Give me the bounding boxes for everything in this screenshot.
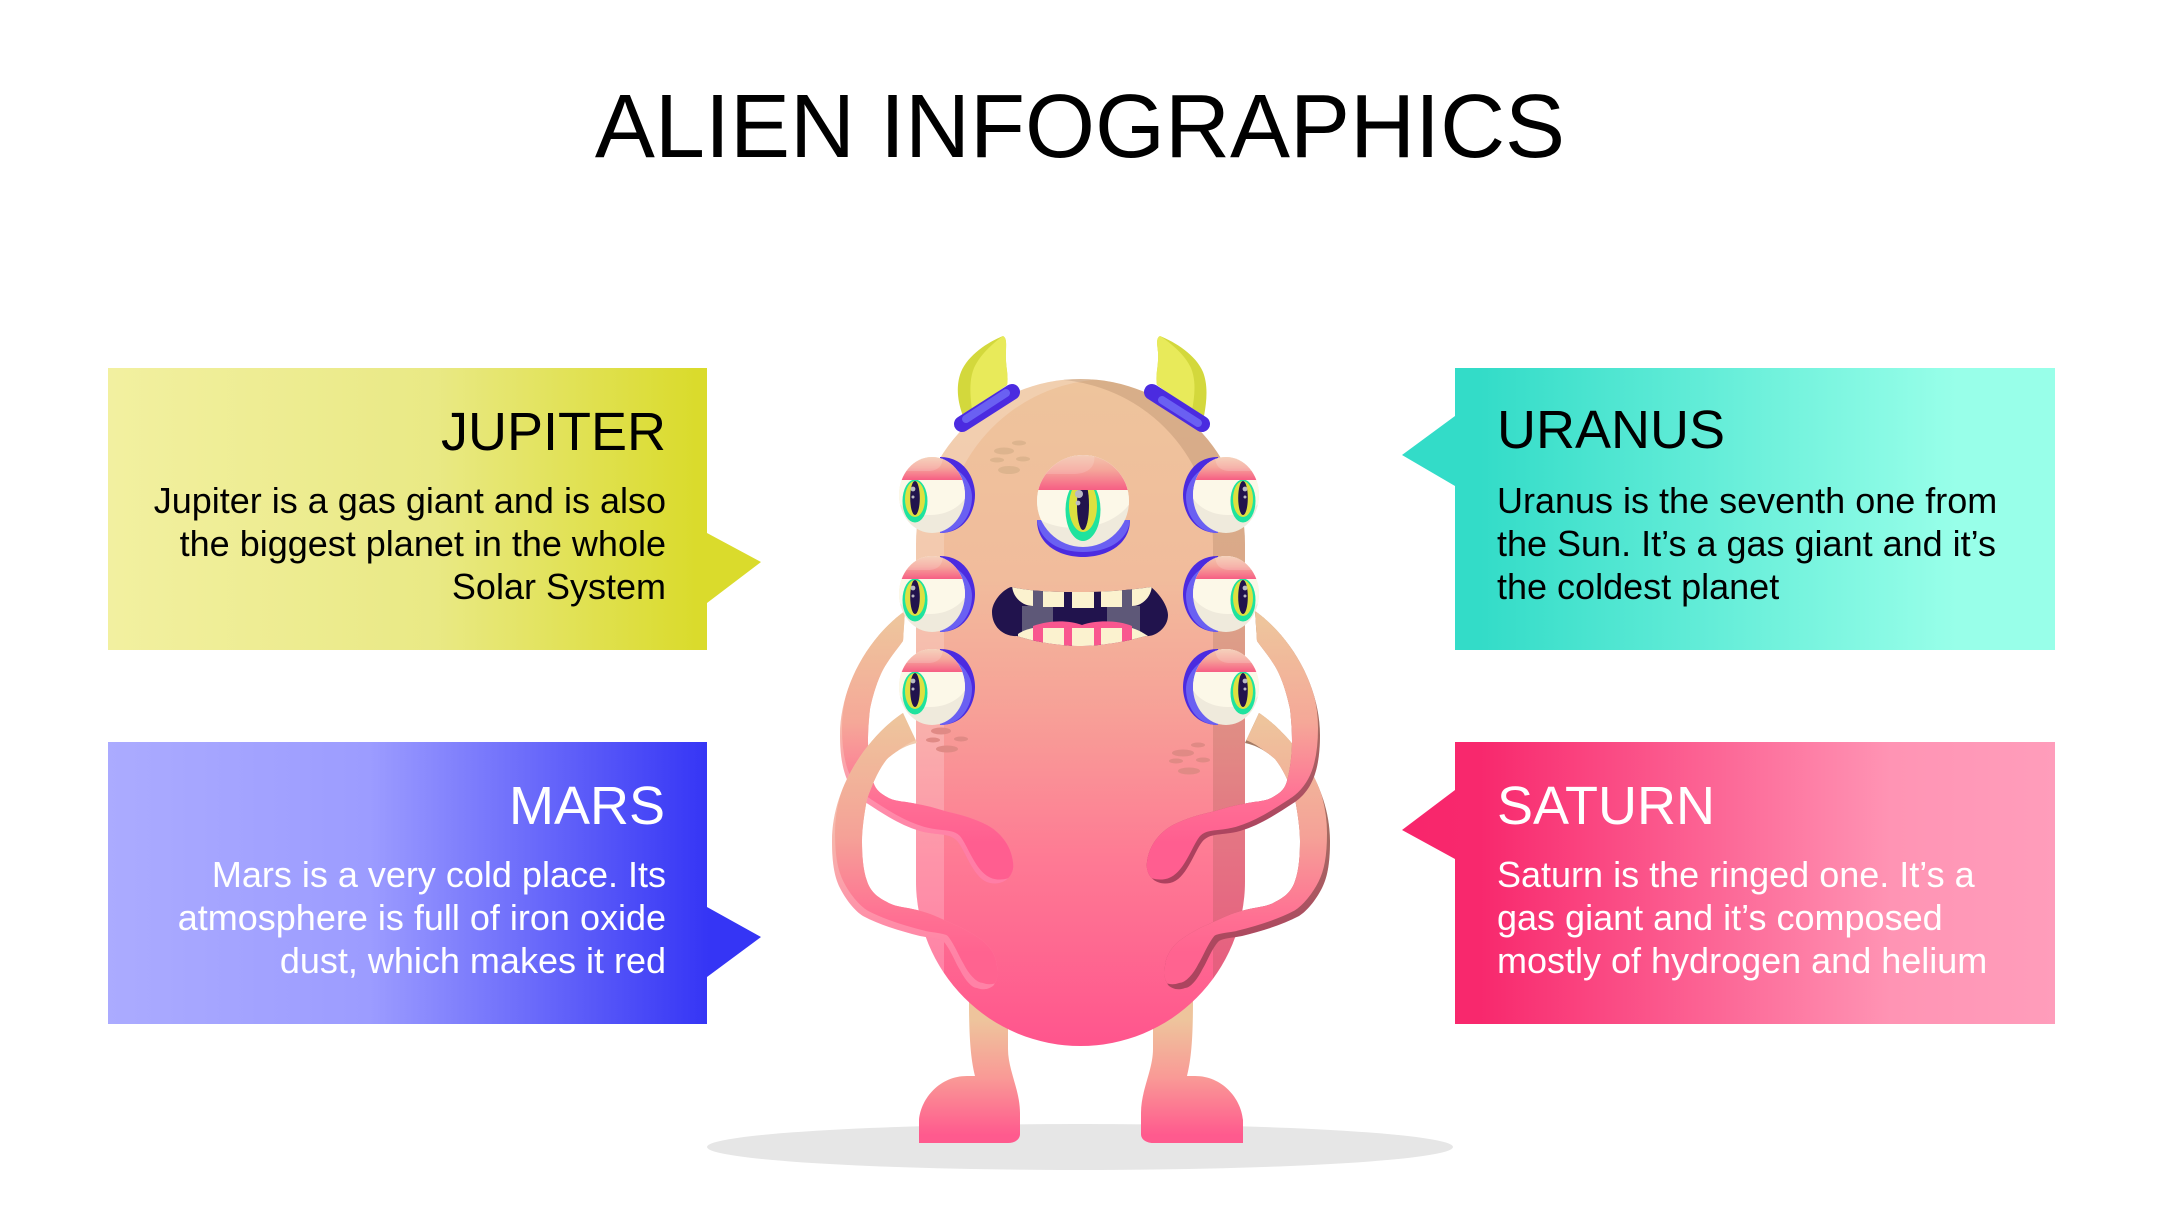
left horn — [958, 336, 1008, 416]
panel: Uranus — [1402, 368, 2055, 650]
body shading — [916, 379, 1245, 978]
heading: Uranus: URANUS — [1497, 400, 1725, 460]
left headband — [962, 392, 1012, 424]
alien character — [820, 336, 1342, 1143]
left upper arm — [840, 612, 1014, 884]
center eye — [1037, 455, 1130, 557]
upper teeth — [1012, 587, 1152, 608]
callout shape: Uranus — [1402, 368, 2055, 650]
text block: Mars: Mars is a very cold place. Its — [212, 854, 666, 895]
freckles — [926, 440, 1210, 774]
right leg — [1141, 1000, 1243, 1143]
text block: Saturn: mostly of hydrogen and helium — [1497, 940, 1987, 981]
text block: Jupiter: Solar System — [452, 566, 666, 607]
heading: Saturn: SATURN — [1497, 776, 1715, 836]
heading: Mars: MARS — [509, 776, 665, 836]
right lower arm — [1164, 713, 1330, 990]
right upper arm — [1146, 611, 1320, 884]
text block: Uranus: Uranus is the seventh one from — [1497, 480, 1997, 521]
text block: Uranus: the coldest planet — [1497, 566, 1779, 607]
side eyes: right column — [1183, 451, 1268, 725]
right headband — [1152, 392, 1202, 424]
left lower arm — [832, 713, 996, 990]
text block: Jupiter: the biggest planet in the whole — [180, 523, 666, 564]
panel: Jupiter — [108, 368, 761, 650]
text block: Saturn: gas giant and it’s composed — [1497, 897, 1943, 938]
text block: Uranus: the Sun. It’s a gas giant and it’s — [1497, 523, 1996, 564]
left leg — [919, 1000, 1020, 1143]
callout shape: Saturn — [1402, 742, 2055, 1024]
text block: Saturn: Saturn is the ringed one. It’s a — [1497, 854, 1976, 895]
mouth — [992, 587, 1168, 646]
panel: Mars — [108, 742, 761, 1024]
side eyes: left column — [890, 451, 975, 725]
right horn — [1156, 336, 1206, 416]
heading: Jupiter: JUPITER — [441, 402, 666, 462]
text block: Jupiter: Jupiter is a gas giant and is also — [154, 480, 666, 521]
lower gum — [1033, 621, 1132, 646]
panel: Saturn — [1402, 742, 2055, 1024]
title: ALIEN INFOGRAPHICS — [595, 77, 1565, 177]
text block: Mars: dust, which makes it red — [280, 940, 666, 981]
callout shape: Mars — [108, 742, 761, 1024]
lower teeth — [1018, 628, 1148, 646]
body — [916, 379, 1245, 1046]
ground shadow — [707, 1124, 1453, 1170]
text block: Mars: atmosphere is full of iron oxide — [178, 897, 666, 938]
callout shape: Jupiter — [108, 368, 761, 650]
